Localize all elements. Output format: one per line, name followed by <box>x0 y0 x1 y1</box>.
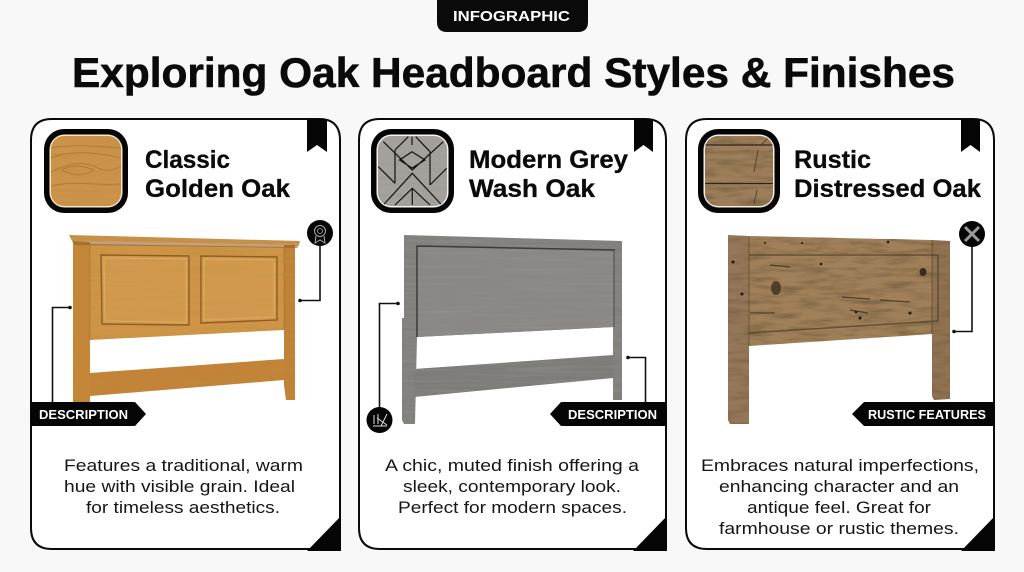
corner accent <box>961 516 995 551</box>
description text: antique feel. Great for <box>747 498 931 517</box>
description text: Embraces natural imperfections, <box>701 456 979 475</box>
heading: Classic <box>145 146 230 174</box>
heading <box>794 146 981 203</box>
description text: A chic, muted finish offering a <box>385 456 640 475</box>
heading: Golden Oak <box>145 175 290 203</box>
label: rustic features <box>852 402 995 426</box>
heading: Modern Grey <box>469 146 628 174</box>
label: description <box>31 402 146 426</box>
heading <box>469 146 628 203</box>
heading: Rustic <box>794 146 871 174</box>
panel: classic golden oak <box>31 119 341 551</box>
icon: bookmark <box>634 119 653 152</box>
label: description: DESCRIPTION <box>568 407 657 422</box>
headboard: rustic <box>728 235 950 424</box>
description text <box>385 456 640 517</box>
connector: left <box>52 306 72 403</box>
card frame <box>686 119 994 549</box>
description text: Features a traditional, warm <box>64 456 303 475</box>
swatch: grey geometric <box>371 129 454 213</box>
heading: Wash Oak <box>469 175 595 203</box>
description text: farmhouse or rustic themes. <box>719 519 959 538</box>
label: rustic features: RUSTIC FEATURES <box>868 407 986 422</box>
swatch: golden oak <box>44 129 128 213</box>
connector: right <box>626 356 646 402</box>
connector with quality badge <box>298 220 333 302</box>
icon: bookmark <box>961 119 980 152</box>
heading: Distressed Oak <box>794 175 981 203</box>
panel: modern grey wash oak <box>359 119 667 551</box>
icon: bookmark <box>307 119 327 152</box>
headboard: golden oak <box>69 235 300 402</box>
panel: rustic distressed oak <box>686 119 995 551</box>
description text: Perfect for modern spaces. <box>398 498 627 517</box>
connector with sketch badge <box>366 302 400 433</box>
badge: infographic: INFOGRAPHIC <box>453 8 570 25</box>
description text: for timeless aesthetics. <box>86 498 280 517</box>
description text: hue with visible grain. Ideal <box>64 477 295 496</box>
card frame <box>31 119 340 549</box>
headboard: grey wash <box>402 235 622 424</box>
card frame <box>359 119 666 549</box>
swatch: distressed wood <box>698 129 780 213</box>
label: description <box>550 402 667 426</box>
title: Exploring Oak Headboard Styles & Finishes <box>72 49 955 96</box>
description text: sleek, contemporary look. <box>403 477 621 496</box>
heading <box>145 146 290 203</box>
corner accent <box>307 516 341 551</box>
label: description: DESCRIPTION <box>39 407 128 422</box>
corner accent <box>633 516 667 551</box>
description text <box>701 456 979 538</box>
description text: enhancing character and an <box>719 477 959 496</box>
badge: infographic <box>437 0 588 32</box>
connector with tools badge <box>952 221 985 333</box>
description text <box>64 456 303 517</box>
